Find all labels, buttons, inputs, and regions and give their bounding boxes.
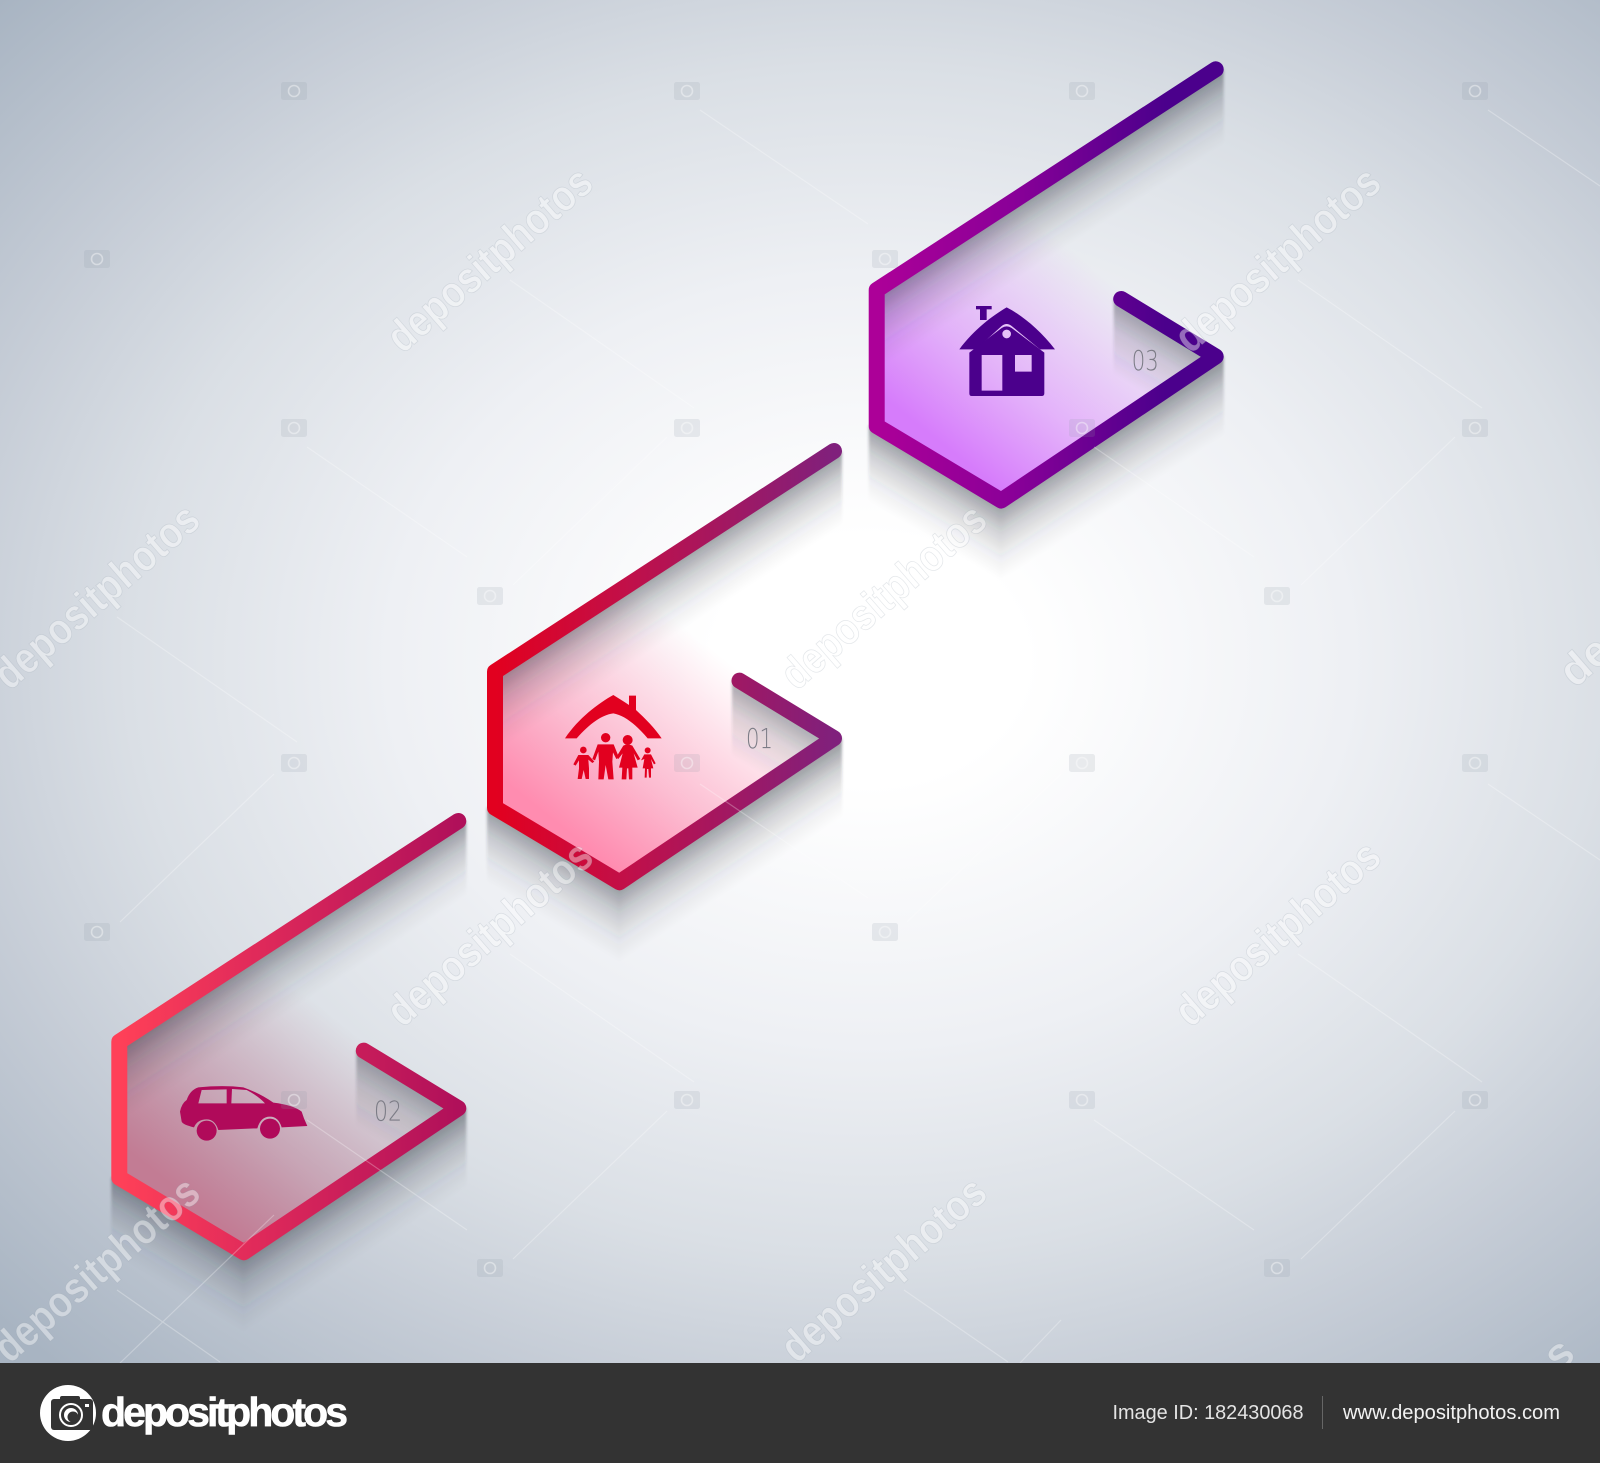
- panel: step 02: [111, 821, 466, 1332]
- icon: car: [180, 1086, 307, 1141]
- number 01: 01: [746, 722, 773, 755]
- step fill: [495, 513, 834, 882]
- website url: www.depositphotos.com: [1342, 1402, 1560, 1424]
- panel: step 01: [487, 451, 842, 962]
- step outline: [495, 451, 834, 882]
- step fill: [877, 131, 1216, 500]
- watermark overlay: depositphotos: [377, 157, 602, 362]
- number 02: 02: [374, 1095, 402, 1128]
- step outline: [119, 821, 458, 1252]
- watermark overlay: s: [1533, 1328, 1584, 1381]
- image id: Image ID: 182430068: [1112, 1402, 1304, 1424]
- icon: house: [959, 306, 1055, 396]
- step outline: [877, 69, 1216, 501]
- step shadow: [869, 69, 1224, 581]
- watermark overlay: depositphotos: [771, 1167, 996, 1372]
- watermark overlay: depositphotos: [1165, 157, 1390, 362]
- panel: step 03: [869, 69, 1224, 581]
- logo: camera badge: [40, 1385, 96, 1441]
- watermark overlay: depositphotos: [771, 494, 996, 699]
- number 03: 03: [1132, 344, 1159, 377]
- watermark overlay: depositphotos: [1165, 831, 1390, 1036]
- step fill: [119, 883, 458, 1252]
- footer bar: [0, 1363, 1600, 1463]
- watermark overlay: depositphotos: [377, 831, 602, 1036]
- icon: family under roof: [565, 695, 662, 779]
- step shadow: [487, 451, 842, 962]
- step shadow: [111, 821, 466, 1332]
- logo: wordmark: depositphotos: [101, 1389, 348, 1435]
